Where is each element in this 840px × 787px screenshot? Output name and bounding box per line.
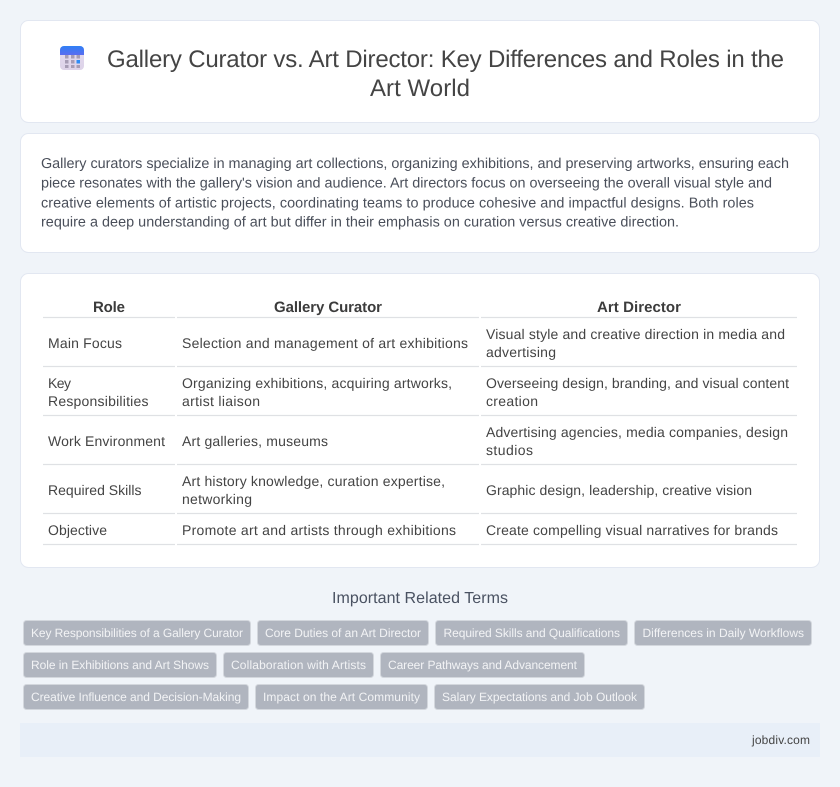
text block: introduction paragraph: require a deep understanding of art but differ in their emphasis on curation versus creative direction.	[41, 214, 679, 230]
panel: comparison table	[20, 274, 820, 568]
text block: introduction paragraph	[41, 156, 789, 230]
table row: main focus: advertising	[486, 344, 556, 360]
tag: Differences in Daily Workflows	[642, 626, 804, 640]
text block: introduction paragraph: Gallery curators specialize in managing art collections, organizing exhibitions, and preserving artworks, ensuring each	[41, 156, 789, 172]
tag	[258, 620, 428, 646]
table row: key responsibilities: Responsibilities	[48, 393, 148, 409]
table row: key responsibilities	[48, 375, 789, 409]
table row: work environment: studios	[486, 442, 533, 458]
tag: Career Pathways and Advancement	[388, 658, 578, 672]
tag	[634, 620, 812, 646]
text block: introduction paragraph: creative elements of artistic projects, coordinating teams to produce cohesive and impactful designs. Both roles	[41, 196, 754, 212]
table row: key responsibilities: artist liaison	[182, 393, 260, 409]
text block: introduction paragraph: piece resonates with the gallery's vision and audience. Art directors focus on overseeing the overall visual style and	[41, 176, 772, 192]
tag: Creative Influence and Decision-Making	[31, 690, 241, 704]
tag	[380, 652, 584, 678]
table row: required skills: Graphic design, leadership, creative vision	[486, 482, 752, 498]
table header row: Art Director	[597, 299, 681, 316]
table row: work environment: Advertising agencies, media companies, design	[486, 424, 788, 440]
table row: main focus: Visual style and creative direction in media and	[486, 326, 785, 342]
tag: Collaboration with Artists	[231, 658, 366, 672]
table row: key responsibilities: Overseeing design, branding, and visual content	[486, 375, 789, 391]
table header row	[93, 299, 681, 316]
tag	[24, 652, 216, 678]
tag: Role in Exhibitions and Art Shows	[31, 658, 209, 672]
tag list: related terms	[24, 620, 812, 710]
table row: key responsibilities: Key	[48, 375, 71, 391]
table row: key responsibilities: Organizing exhibitions, acquiring artworks,	[182, 375, 452, 391]
table row: required skills: networking	[182, 491, 252, 507]
tag	[24, 684, 248, 710]
heading: important related terms: Important Related Terms	[332, 590, 508, 607]
tag: Salary Expectations and Job Outlook	[442, 690, 638, 704]
panel: title header	[20, 20, 820, 122]
title	[107, 46, 784, 102]
tag	[436, 620, 628, 646]
table row: work environment: Work Environment	[48, 433, 165, 449]
panel: introduction	[20, 134, 820, 252]
tag: Required Skills and Qualifications	[444, 626, 620, 640]
tag	[434, 684, 644, 710]
table row: objective	[48, 522, 778, 538]
table header row: Role	[93, 299, 125, 316]
table header row: Gallery Curator	[274, 299, 382, 316]
table row: main focus: Main Focus	[48, 335, 122, 351]
table row: work environment: Art galleries, museums	[182, 433, 328, 449]
table row: work environment	[48, 424, 788, 458]
table row: objective: Objective	[48, 522, 107, 538]
table row: objective: Create compelling visual narratives for brands	[486, 522, 778, 538]
footer source: jobdiv.com	[751, 733, 810, 747]
table row: objective: Promote art and artists through exhibitions	[182, 522, 456, 538]
icon: calendar	[60, 46, 84, 70]
title: Art World	[370, 75, 470, 102]
tag: Core Duties of an Art Director	[265, 626, 421, 640]
tag	[224, 652, 374, 678]
title: Gallery Curator vs. Art Director: Key Differences and Roles in the	[107, 46, 784, 73]
tag: Impact on the Art Community	[263, 690, 420, 704]
tag: Key Responsibilities of a Gallery Curator	[31, 626, 243, 640]
tag	[256, 684, 428, 710]
tag	[24, 620, 250, 646]
table row: required skills: Required Skills	[48, 482, 142, 498]
table row: main focus	[48, 326, 785, 360]
table row: key responsibilities: creation	[486, 393, 538, 409]
table row: main focus: Selection and management of art exhibitions	[182, 335, 468, 351]
footer	[20, 723, 820, 757]
table row: required skills: Art history knowledge, curation expertise,	[182, 473, 445, 489]
table row: required skills	[48, 473, 752, 507]
